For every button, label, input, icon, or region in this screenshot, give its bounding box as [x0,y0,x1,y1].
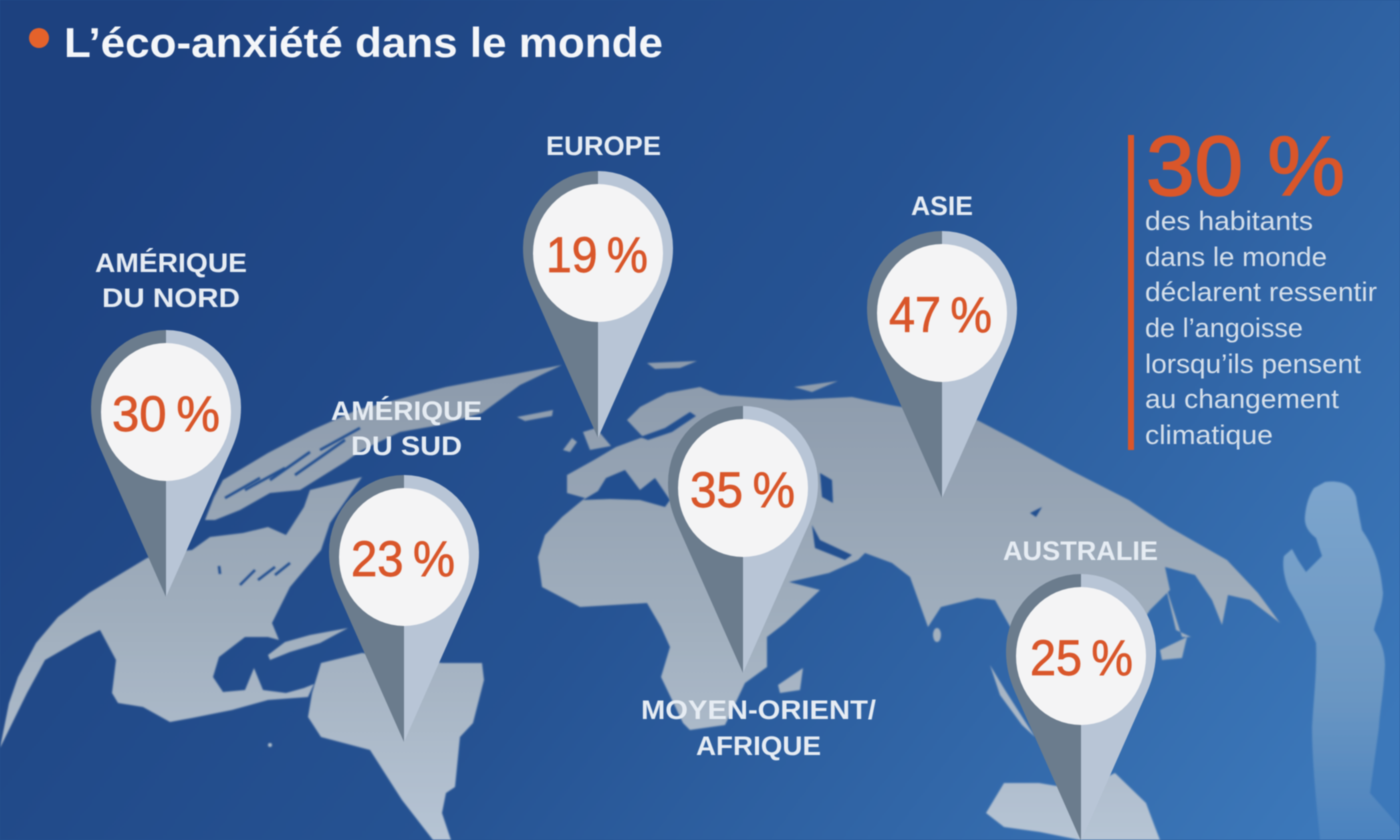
map: Arctic Canada and Greenland [205,365,562,520]
callout: 30 % worldwide [1128,119,1377,450]
label: Amérique du Sud: AMÉRIQUE [331,395,482,426]
pin: Australie [1006,574,1156,840]
callout text: dans le monde [1145,242,1327,272]
callout text [1145,206,1377,450]
label: Amérique du Nord: DU NORD [102,283,240,313]
map: Europe, Asia and Africa [538,387,1280,730]
callout figure: 30 % [1146,119,1345,213]
pin: Amérique du Nord [91,330,241,597]
map: Australia [986,773,1160,840]
woman silhouette [1283,482,1400,840]
label: Australie: AUSTRALIE [1003,536,1158,566]
pin: Australie: 25 % [1030,630,1133,686]
callout text: déclarent ressentir [1145,277,1377,307]
callout text: des habitants [1145,206,1313,236]
pin: Moyen-Orient / Afrique [668,406,818,673]
pin: Europe [523,171,673,438]
label: Moyen-Orient / Afrique [641,695,877,761]
map: South America [308,653,484,840]
label: Europe: EUROPE [546,131,661,161]
map: islands [268,361,1191,747]
label: Moyen-Orient / Afrique: MOYEN-ORIENT/ [641,695,877,725]
callout rule [1128,135,1134,450]
callout text: de l’angoisse [1145,313,1303,343]
pin: Asie [867,231,1017,498]
label: Asie: ASIE [911,191,973,221]
label: Amérique du Sud [331,395,482,461]
callout text: lorsqu’ils pensent [1145,349,1362,379]
pin: Amérique du Nord: 30 % [112,386,220,442]
pin: Europe: 19 % [546,227,648,283]
label: Moyen-Orient / Afrique: AFRIQUE [696,731,821,761]
icon: title bullet [29,28,49,48]
label: Amérique du Nord: AMÉRIQUE [95,247,247,278]
pin: Asie: 47 % [889,287,992,343]
map: North America [0,477,362,748]
pin: Moyen-Orient / Afrique: 35 % [690,462,795,518]
callout text: au changement [1145,384,1340,414]
label: Amérique du Nord [95,247,247,313]
title: L’éco-anxiété dans le monde [64,19,663,66]
world map [0,361,1280,840]
region labels [95,131,1158,761]
pin: Amérique du Sud: 23 % [351,531,455,587]
pin: Amérique du Sud [329,475,479,742]
label: Amérique du Sud: DU SUD [351,431,462,461]
callout text: climatique [1145,420,1273,450]
map: inland water [219,428,360,585]
